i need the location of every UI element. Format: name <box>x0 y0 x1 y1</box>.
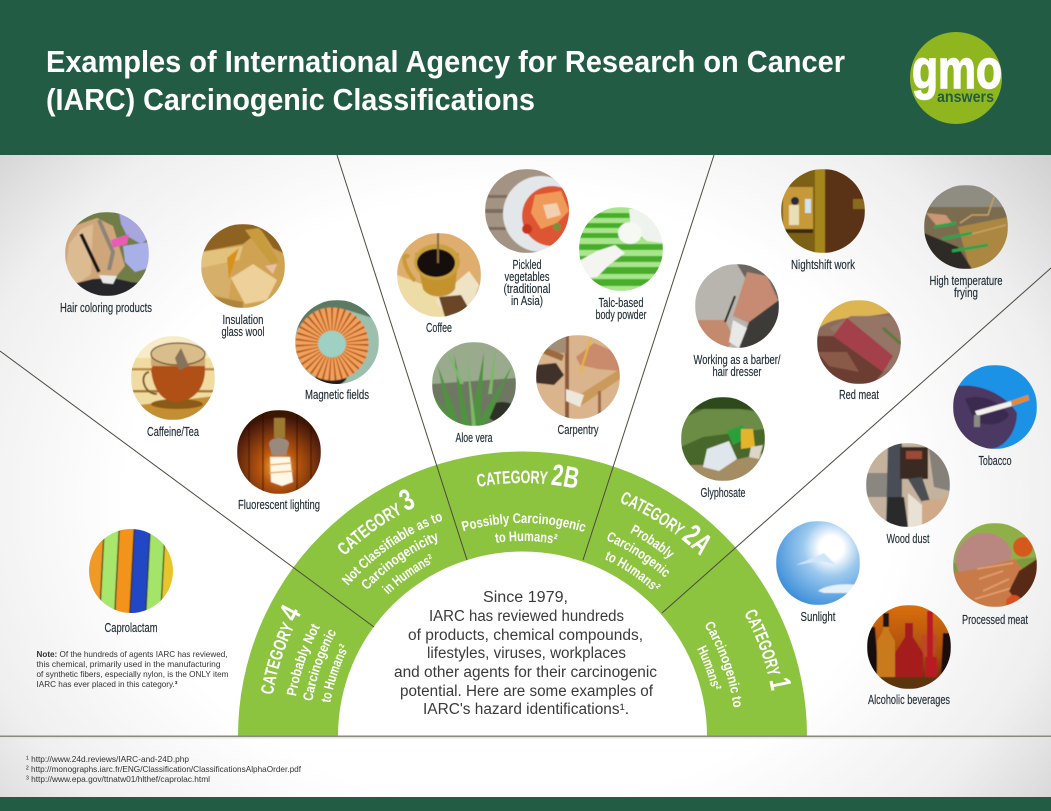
photo: coil <box>295 300 379 386</box>
category 1 text: Humans² <box>697 645 722 690</box>
label: in Asia) <box>511 294 543 308</box>
note <box>36 649 228 689</box>
photo: aloe <box>432 342 518 426</box>
label <box>930 274 1003 300</box>
item: Carpentry <box>536 335 620 437</box>
category 4 text <box>261 604 346 702</box>
footnotes <box>26 754 302 784</box>
label: High temperature <box>930 274 1003 288</box>
item: Hair coloring products <box>60 212 152 315</box>
center paragraph: and other agents for their carcinogenic <box>394 664 657 681</box>
label: hair dresser <box>712 365 762 379</box>
photo: steak <box>817 300 901 384</box>
label: Caprolactam <box>104 621 158 635</box>
label <box>504 258 550 308</box>
item: Glyphosate <box>681 397 765 500</box>
category 2A text: to Humans² <box>606 551 661 590</box>
item: Caprolactam <box>89 529 173 635</box>
label: Aloe vera <box>456 431 493 445</box>
photo: insulation <box>201 224 285 308</box>
item: High temperature frying <box>924 185 1008 300</box>
item: Sunlight <box>776 521 860 624</box>
item: Pickled vegetables <box>485 169 569 308</box>
base line <box>0 736 1051 738</box>
item: Talc-based body powder <box>579 207 663 322</box>
category 3 text: CATEGORY 3 <box>338 490 414 554</box>
category 1 text: CATEGORY 1 <box>746 610 791 691</box>
photo: cords <box>89 529 173 613</box>
item: Alcoholic beverages <box>867 605 951 707</box>
category 4 text: Carcinogenic <box>303 630 336 700</box>
label: Processed meat <box>962 613 1028 627</box>
photo: carpentry <box>536 335 620 419</box>
label: Hair coloring products <box>60 301 152 315</box>
item: Fluorescent lighting <box>237 410 321 512</box>
item: Caffeine/Tea <box>131 336 215 439</box>
photo: hair coloring <box>65 212 149 296</box>
label: frying <box>954 286 978 300</box>
photo: talc <box>579 207 663 291</box>
item: Wood dust <box>866 443 950 546</box>
footnotes: ¹ http://www.24d.reviews/IARC-and-24D.php <box>26 754 189 764</box>
label: glass wool <box>222 325 264 339</box>
center paragraph: of products, chemical compounds, <box>408 627 643 644</box>
category 3 text: in Humans² <box>382 554 432 594</box>
photo: frying <box>924 185 1008 269</box>
note: Note: Of the hundreds of agents IARC has reviewed, <box>36 649 228 659</box>
label: Coffee <box>426 321 452 335</box>
category 3 text: Not Classifiable as to <box>342 514 442 586</box>
center paragraph: potential. Here are some examples of <box>400 683 654 700</box>
category 2A text <box>606 492 710 590</box>
item: Red meat <box>817 300 901 402</box>
label: Pickled <box>512 258 542 272</box>
arch <box>238 451 807 736</box>
category 2A text: Probably <box>630 524 674 559</box>
header band <box>0 0 1051 155</box>
logo: gmo answers <box>910 32 1002 124</box>
label: Tobacco <box>978 454 1012 468</box>
photo: coffee <box>397 233 481 317</box>
label <box>596 296 646 322</box>
center paragraph: IARC's hazard identifications¹. <box>423 701 629 718</box>
item: Aloe vera <box>432 342 518 445</box>
note: of synthetic fibers, especially nylon, is the ONLY item <box>36 669 228 679</box>
segment dividers <box>0 155 1051 627</box>
logo: gmo answers: answers <box>937 89 994 106</box>
note: IARC has ever placed in this category.³ <box>36 679 178 689</box>
item: Processed meat <box>953 523 1037 627</box>
photo: chainsaw <box>866 443 950 527</box>
photo: bottles <box>867 605 951 689</box>
category 2B text: CATEGORY 2B <box>477 464 578 488</box>
label: Caffeine/Tea <box>147 425 199 439</box>
label: Red meat <box>839 388 879 402</box>
title <box>46 44 845 117</box>
category 2B text: Possibly Carcinogenic <box>461 513 586 532</box>
title: Examples of International Agency for Research on Cancer <box>46 44 845 79</box>
center paragraph: Since 1979, <box>483 589 568 606</box>
label: vegetables <box>504 270 550 284</box>
photo: cigarette <box>953 365 1037 449</box>
category 2B text: to Humans² <box>494 531 558 544</box>
item: Insulation glass wool <box>201 224 285 339</box>
category 4 text: to Humans² <box>322 644 346 702</box>
item: Nightshift work <box>781 169 865 272</box>
photo: barber <box>695 264 779 348</box>
logo: gmo answers: gmo <box>912 38 1002 100</box>
center paragraph <box>394 589 657 718</box>
photo: nightshift <box>781 169 865 253</box>
label: Sunlight <box>800 610 836 624</box>
footnotes: ² http://monographs.iarc.fr/ENG/Classification/ClassificationsAlphaOrder.pdf <box>26 764 302 774</box>
photo: kimchi <box>485 169 569 253</box>
label: Working as a barber/ <box>694 353 781 367</box>
item: Magnetic fields <box>295 300 379 402</box>
center paragraph: lifestyles, viruses, workplaces <box>427 645 626 662</box>
category 1 text <box>697 610 791 708</box>
label: Fluorescent lighting <box>238 498 320 512</box>
photo: meats <box>953 523 1037 611</box>
photo: tea <box>131 336 215 420</box>
category 2A text: CATEGORY 2A <box>621 492 710 556</box>
label <box>694 353 781 379</box>
category 2A text: Carcinogenic <box>608 532 669 577</box>
center paragraph: IARC has reviewed hundreds <box>429 608 624 625</box>
label: body powder <box>596 308 646 322</box>
item: Coffee <box>397 233 481 335</box>
item: Working as a barber/hair dresser <box>694 264 781 379</box>
note: this chemical, primarily used in the manufacturing <box>36 659 221 669</box>
category 3 text: Carcinogenicity <box>362 533 438 589</box>
label: Carpentry <box>558 423 599 437</box>
footer band <box>0 797 1051 811</box>
label <box>222 313 264 339</box>
category 1 text: Carcinogenic to <box>706 622 742 708</box>
photo: sprayer <box>681 397 765 481</box>
label: Insulation <box>222 313 264 327</box>
category 4 text: Probably Not <box>286 624 320 696</box>
footnotes: ³ http://www.epa.gov/ttnatw01/hlthef/caprolac.html <box>26 774 210 784</box>
label: Nightshift work <box>791 258 856 272</box>
label: Wood dust <box>886 532 930 546</box>
category 4 text: CATEGORY 4 <box>261 604 301 694</box>
title: (IARC) Carcinogenic Classifications <box>46 82 535 117</box>
category 2B text <box>461 464 586 544</box>
label: Alcoholic beverages <box>868 693 950 707</box>
photo: bulb <box>237 410 321 494</box>
photo: sky <box>776 521 860 605</box>
label: Magnetic fields <box>305 388 369 402</box>
item: Tobacco <box>953 365 1037 468</box>
label: (traditional <box>504 282 550 296</box>
label: Talc-based <box>598 296 644 310</box>
label: Glyphosate <box>700 486 746 500</box>
